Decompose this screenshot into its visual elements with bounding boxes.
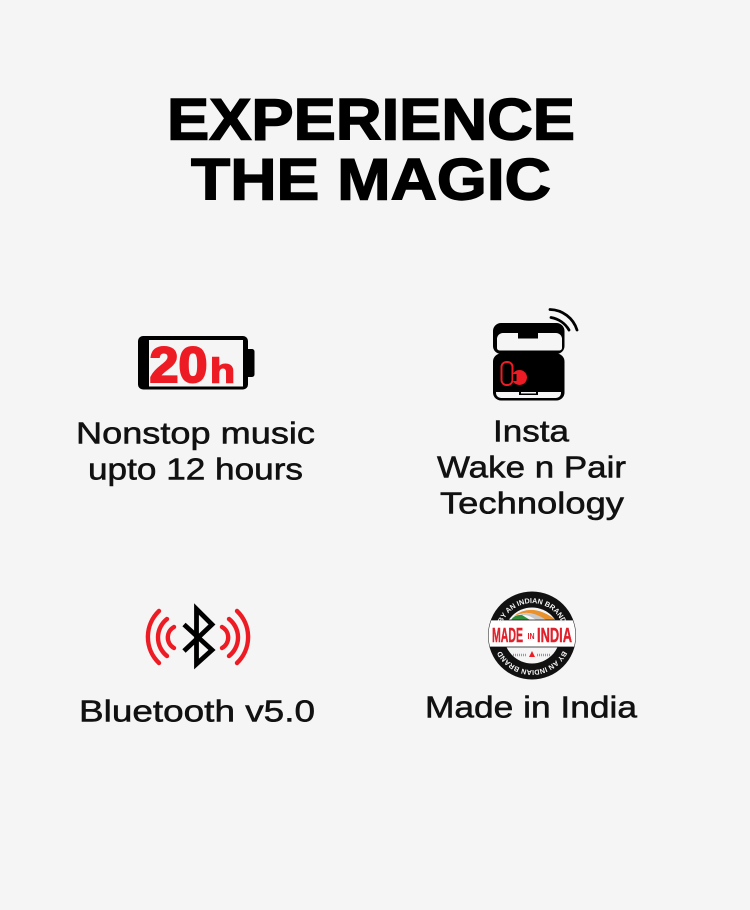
icon: battery 20h: 20 [150, 337, 208, 393]
icon: made in india badge: INDIA [537, 625, 572, 647]
icon: made in india badge [488, 592, 576, 680]
title: EXPERIENCE [167, 87, 575, 152]
icon: made in india badge: IN [528, 632, 535, 641]
text: nonstop music: Nonstop music [76, 416, 315, 450]
icon: bluetooth waves [148, 609, 248, 664]
text: insta wake n pair: Wake n Pair [437, 450, 626, 484]
icon: made in india badge: BY AN INDIAN BRAND [498, 651, 568, 675]
text: insta wake n pair: Technology [440, 486, 625, 520]
icon: battery 20h: h [210, 352, 235, 390]
icon: earbud case with signal [493, 310, 577, 400]
text: insta wake n pair [437, 414, 626, 520]
icon: battery 20h [138, 336, 254, 393]
text: nonstop music: upto 12 hours [88, 452, 303, 486]
text: nonstop music [76, 416, 315, 486]
text: made in india: Made in India [425, 690, 637, 724]
icon: made in india badge: MADE [492, 625, 523, 647]
icon: made in india badge: BY AN INDIAN BRAND [498, 598, 566, 622]
text: insta wake n pair: Insta [493, 414, 569, 448]
title: THE MAGIC [191, 147, 551, 212]
title [167, 87, 575, 212]
text: bluetooth version: Bluetooth v5.0 [79, 694, 315, 728]
